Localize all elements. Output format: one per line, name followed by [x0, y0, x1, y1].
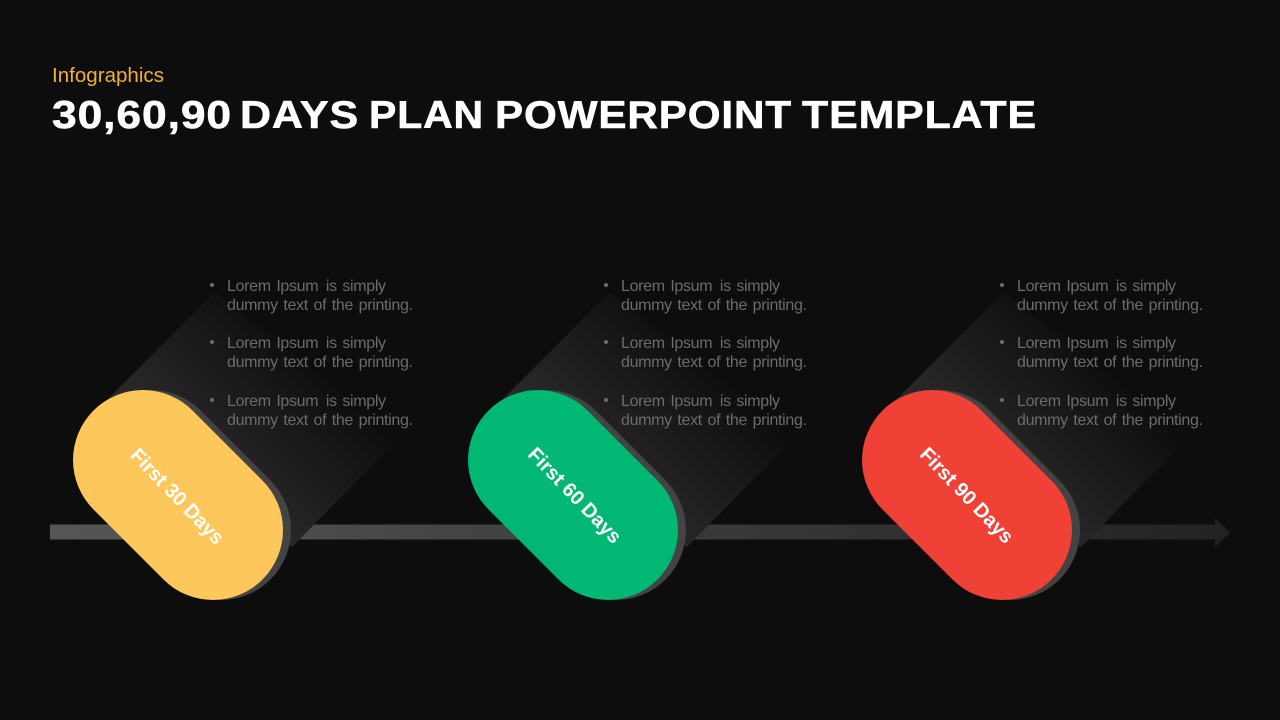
pill 60: [439, 361, 707, 629]
pill 30: [44, 361, 312, 629]
eyebrow label: Infographics: [52, 65, 164, 87]
bullets 90: dummy text of the printing.: [1017, 297, 1203, 314]
title: [52, 94, 1037, 137]
timeline arrow: [50, 518, 1230, 547]
bullets 30: Lorem Ipsum is simply: [227, 278, 386, 295]
pill side 90: [841, 361, 1109, 629]
bullets 90: dummy text of the printing.: [1017, 354, 1203, 371]
bullets 30: Lorem Ipsum is simply: [227, 335, 386, 352]
bullets 90: Lorem Ipsum is simply: [1017, 278, 1176, 295]
title: POWERPOINT: [495, 94, 792, 137]
step: first 90 days: [833, 278, 1203, 629]
bullets 60: dummy text of the printing.: [621, 412, 807, 429]
pill label 60: First 60 Days: [523, 443, 625, 548]
bullets 30: dummy text of the printing.: [227, 297, 413, 314]
pill 90: [833, 361, 1101, 629]
title: TEMPLATE: [802, 94, 1037, 137]
bullets 60: [604, 278, 807, 429]
bullets 30: dummy text of the printing.: [227, 354, 413, 371]
pill label 30: First 30 Days: [126, 444, 228, 549]
bullets 60: Lorem Ipsum is simply: [621, 335, 780, 352]
bullets 90: Lorem Ipsum is simply: [1017, 393, 1176, 410]
extrusion band 90: [897, 292, 1189, 547]
bullets 30: Lorem Ipsum is simply: [227, 393, 386, 410]
bullets 60: Lorem Ipsum is simply: [621, 278, 780, 295]
pill side 30: [52, 361, 320, 629]
bullets 30: [210, 278, 413, 429]
bullets 60: dummy text of the printing.: [621, 354, 807, 371]
bullets 90: dummy text of the printing.: [1017, 412, 1203, 429]
extrusion band 30: [108, 292, 400, 547]
bullets 90: Lorem Ipsum is simply: [1017, 335, 1176, 352]
bullets 30: dummy text of the printing.: [227, 412, 413, 429]
extrusion band 60: [503, 292, 795, 547]
bullets 60: Lorem Ipsum is simply: [621, 393, 780, 410]
title: PLAN: [369, 94, 484, 137]
bullets 90: [1000, 278, 1203, 429]
pill label 90: First 90 Days: [915, 443, 1017, 548]
bullets 60: dummy text of the printing.: [621, 297, 807, 314]
title: DAYS: [240, 94, 359, 137]
pill side 60: [447, 361, 715, 629]
step: first 60 days: [439, 278, 807, 629]
title: 30,60,90: [52, 94, 232, 137]
step: first 30 days: [44, 278, 413, 629]
